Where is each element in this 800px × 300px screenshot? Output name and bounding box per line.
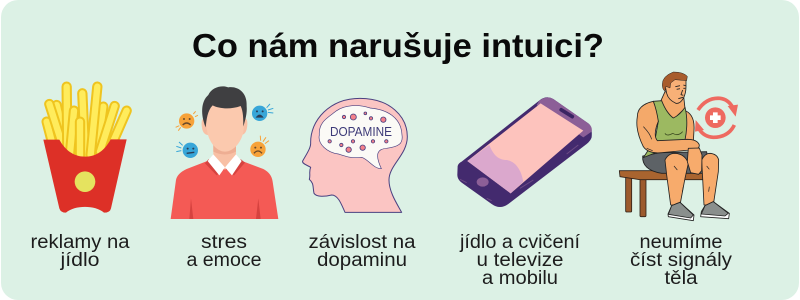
icon: french fries bbox=[43, 87, 127, 213]
screen wave bbox=[467, 145, 523, 193]
label: dopamine addiction bbox=[308, 232, 416, 271]
knee lines bbox=[674, 166, 709, 192]
label: eating in front of screens bbox=[459, 232, 581, 289]
box emblem bbox=[75, 171, 95, 192]
phone body bbox=[457, 97, 592, 207]
brain dots bbox=[328, 112, 388, 152]
icon: smartphone bbox=[457, 97, 592, 207]
side edge highlights bbox=[460, 145, 578, 201]
neck bbox=[660, 92, 685, 119]
label: body signals: neumíme bbox=[640, 232, 722, 253]
phone top cap bbox=[537, 97, 592, 137]
face features bbox=[675, 85, 686, 99]
icon: seated man with health symbol bbox=[619, 72, 738, 221]
label: eating in front of screens: a mobilu bbox=[482, 268, 558, 289]
green tank top bbox=[643, 101, 687, 158]
face bbox=[206, 103, 244, 152]
back arm bbox=[682, 110, 694, 143]
pectoral lines bbox=[665, 132, 683, 135]
left arm bbox=[637, 101, 699, 153]
hair bbox=[662, 72, 687, 91]
fries box bbox=[43, 139, 127, 213]
home button bbox=[477, 177, 489, 187]
left leg bbox=[665, 153, 688, 205]
label: stress: stres bbox=[201, 232, 247, 253]
white collar bbox=[208, 154, 242, 175]
emoji: blue bottom-left bbox=[176, 142, 198, 158]
shoes bbox=[668, 202, 729, 221]
label: body signals: těla bbox=[664, 268, 698, 289]
hand on knee bbox=[687, 148, 702, 174]
dopamine text: DOPAMINE bbox=[330, 125, 392, 139]
emoji: blue top-right bbox=[252, 104, 273, 121]
label: stress bbox=[186, 232, 262, 271]
icon: head with dopamine brain bbox=[303, 98, 407, 212]
label: eating in front of screens: jídlo a cvičení bbox=[459, 232, 581, 253]
title: Co nám narušuje intuici? bbox=[192, 27, 604, 64]
label: dopamine addiction: dopaminu bbox=[317, 250, 407, 271]
screen bbox=[467, 103, 583, 193]
brain cloud bbox=[319, 106, 402, 169]
head silhouette bbox=[303, 98, 407, 212]
red sweater bbox=[171, 161, 278, 219]
label: fast food ads: jídlo bbox=[59, 250, 100, 271]
arm muscle lines bbox=[643, 127, 653, 151]
label: body signals: číst signály bbox=[630, 250, 733, 271]
label: fast food ads bbox=[30, 232, 130, 271]
bench bbox=[619, 171, 703, 217]
icon: stressed man bbox=[171, 86, 278, 219]
label: body signals bbox=[630, 232, 733, 289]
hair bbox=[202, 86, 247, 127]
health cycle symbol bbox=[695, 98, 738, 137]
speaker bbox=[559, 107, 575, 119]
head bbox=[665, 76, 686, 103]
shorts bbox=[643, 152, 708, 173]
label: stress: a emoce bbox=[186, 250, 262, 271]
emoji: orange top-left bbox=[176, 111, 198, 131]
neck and ears bbox=[202, 118, 247, 170]
emoji: orange bottom-right bbox=[250, 136, 269, 157]
label: dopamine addiction: závislost na bbox=[308, 232, 416, 253]
label: eating in front of screens: u televize bbox=[476, 250, 564, 271]
label: fast food ads: reklamy na bbox=[30, 232, 130, 253]
right leg bbox=[702, 153, 719, 205]
